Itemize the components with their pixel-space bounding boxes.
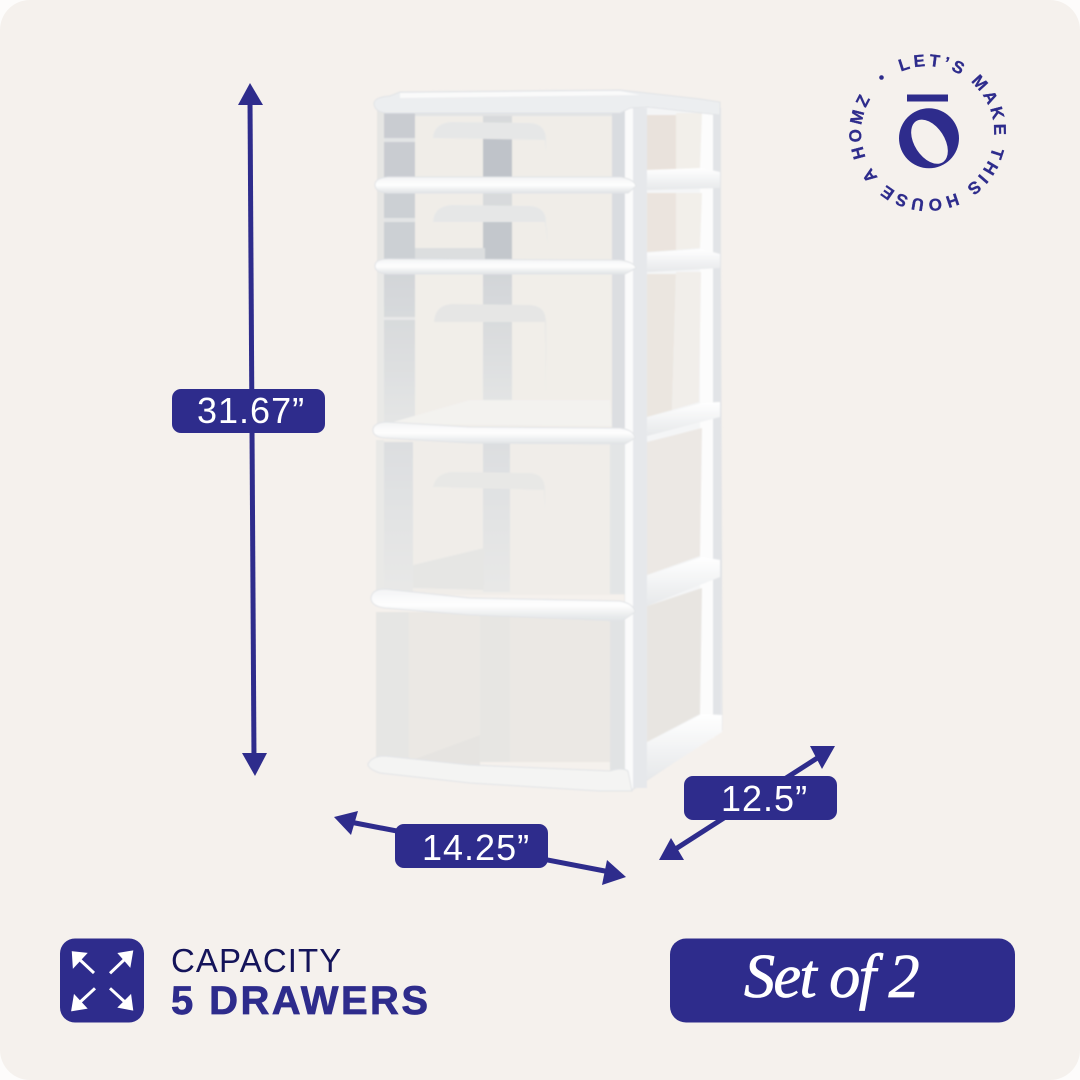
drawer 5 front: [376, 612, 628, 770]
capacity icon: [60, 938, 144, 1022]
product: five drawer storage tower: [368, 90, 722, 791]
drawer 4 front: [376, 440, 628, 595]
set of 2 banner: [670, 938, 1015, 1022]
width dimension: arrow: [334, 811, 626, 885]
width dimension: label: 14.25”: [422, 827, 530, 868]
depth dimension: label: 12.5”: [721, 778, 808, 819]
arrow: up right: [110, 951, 133, 973]
side frame and windows: [625, 106, 722, 790]
circular slogan: LET’S MAKE THIS HOUSE A HOMZ: [849, 54, 1006, 212]
drawer 3 front: [377, 270, 628, 428]
logo mark: [899, 94, 959, 170]
arrow: up left: [72, 952, 94, 973]
height dimension: arrow: [238, 83, 267, 776]
drawer 1 front: [377, 110, 628, 180]
capacity value: 5 DRAWERS: [171, 979, 430, 1023]
height dimension: label: [172, 389, 325, 433]
brand badge: [849, 54, 1006, 212]
arrow: down left: [72, 988, 95, 1011]
drawer 2 front: [377, 190, 628, 262]
drawer rims: [368, 90, 720, 791]
height dimension: label: 31.67”: [197, 390, 305, 431]
arrow: down right: [110, 988, 133, 1010]
capacity label: CAPACITY: [171, 942, 342, 979]
separator dot: [879, 75, 884, 80]
depth dimension: arrow: [659, 746, 835, 860]
width dimension: label: [395, 824, 548, 868]
set of 2 banner: Set of 2: [744, 943, 918, 1011]
depth dimension: label: [684, 776, 837, 820]
